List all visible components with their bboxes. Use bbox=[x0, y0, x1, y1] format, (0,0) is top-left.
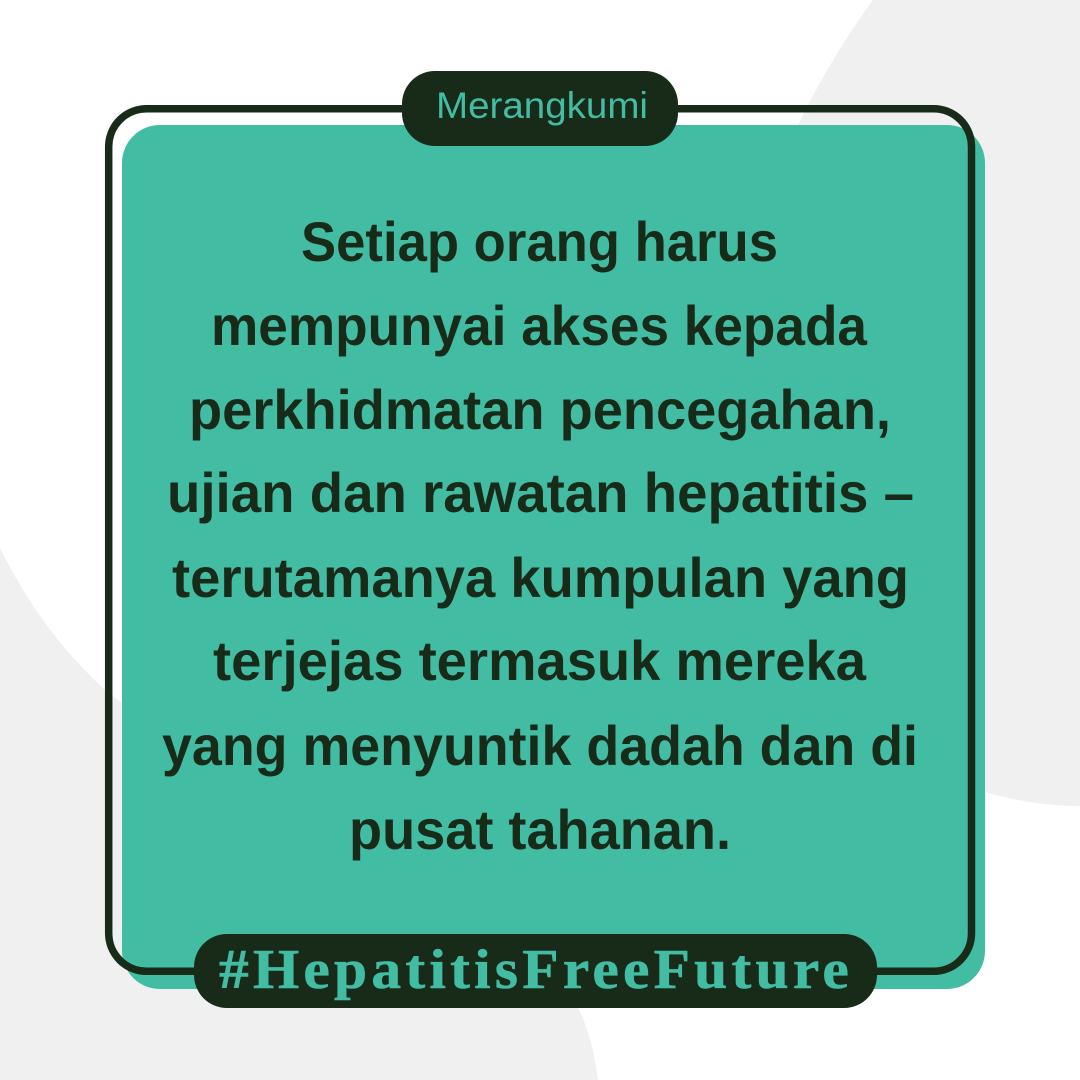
main message text: mempunyai akses kepada bbox=[211, 294, 868, 357]
main message text: Setiap orang harus bbox=[301, 210, 778, 273]
heading pill: Merangkumi bbox=[402, 71, 678, 146]
main message text: ujian dan rawatan hepatitis – bbox=[167, 461, 914, 524]
panel: teal card bbox=[122, 125, 985, 989]
background blob: top right bbox=[798, 0, 1080, 806]
main message text bbox=[162, 210, 918, 861]
panel: dark outline frame bbox=[109, 109, 971, 971]
heading pill: Merangkumi: Merangkumi bbox=[436, 85, 648, 126]
hashtag pill: #HepatitisFreeFuture: #HepatitisFreeFuture bbox=[219, 939, 853, 1001]
main message text: yang menyuntik dadah dan di bbox=[162, 714, 918, 777]
main message text: pusat tahanan. bbox=[349, 798, 731, 861]
background blob: bottom left bbox=[0, 548, 598, 1080]
main message text: terutamanya kumpulan yang bbox=[172, 546, 909, 609]
main message text: terjejas termasuk mereka bbox=[213, 629, 867, 692]
main message text: perkhidmatan pencegahan, bbox=[189, 378, 891, 441]
